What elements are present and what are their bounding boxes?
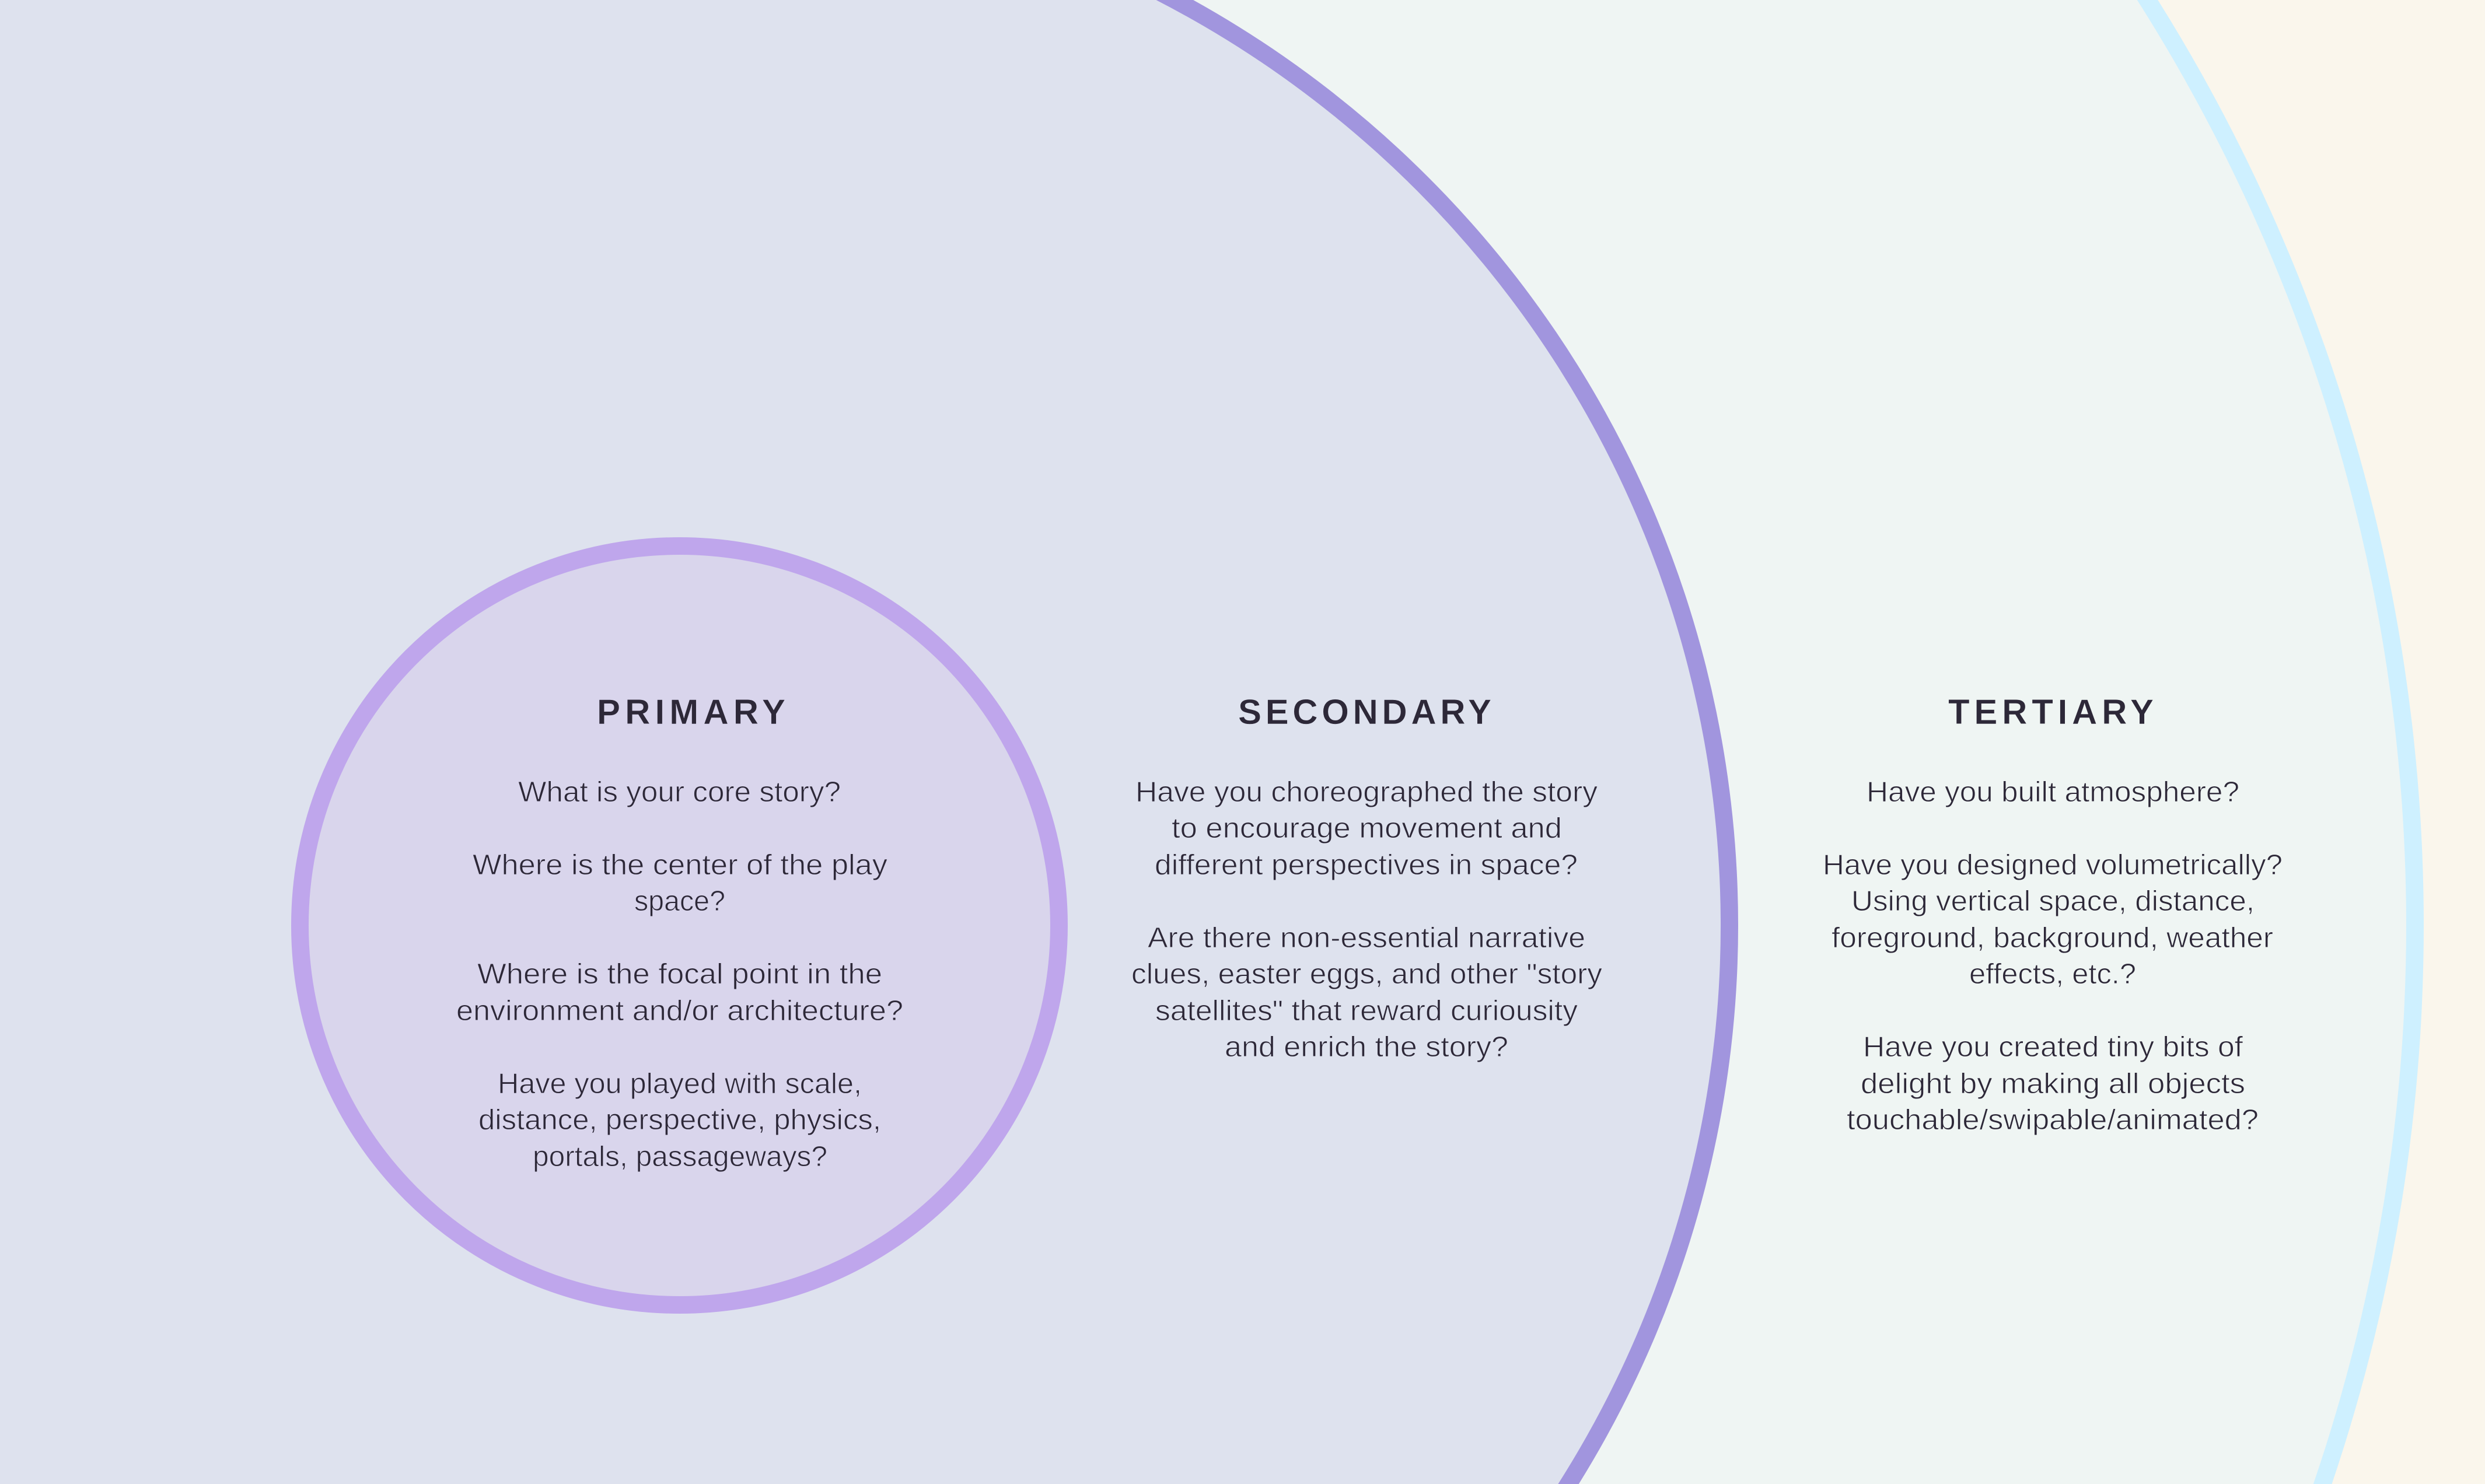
question: focal point: environment and/or architecture? xyxy=(456,995,903,1027)
question: tiny bits of delight: Have you created tiny bits of xyxy=(1863,1031,2243,1063)
primary ring circle xyxy=(300,546,1059,1305)
panel: secondary text xyxy=(1131,692,1603,1063)
question: story satellites: satellites" that reward curiousity xyxy=(1155,995,1578,1027)
question: volumetric design: effects, etc.? xyxy=(1969,958,2136,990)
question: scale and distance xyxy=(478,1068,881,1172)
question: volumetric design xyxy=(1823,849,2283,990)
question: center of play space xyxy=(473,849,888,917)
question: scale and distance: portals, passageways? xyxy=(533,1141,827,1172)
question: tiny bits of delight: delight by making all objects xyxy=(1861,1068,2245,1100)
question: center of play space: Where is the center of the play xyxy=(473,849,888,881)
question: choreography: Have you choreographed the story xyxy=(1135,776,1598,808)
question: focal point: Where is the focal point in the xyxy=(477,958,882,990)
question: volumetric design: Using vertical space, distance, xyxy=(1851,886,2255,917)
question: story satellites: Are there non-essential narrative xyxy=(1148,922,1585,954)
question: scale and distance: Have you played with scale, xyxy=(498,1068,862,1100)
question: tiny bits of delight xyxy=(1847,1031,2259,1136)
panel: primary text xyxy=(456,692,903,1172)
heading: secondary: SECONDARY xyxy=(1238,692,1491,732)
secondary ring and region xyxy=(0,0,1738,1484)
question: volumetric design: foreground, background, weather xyxy=(1832,922,2273,954)
question: story satellites: and enrich the story? xyxy=(1225,1031,1508,1063)
question: choreography: different perspectives in space? xyxy=(1155,849,1578,881)
question: story satellites: clues, easter eggs, and other "story xyxy=(1131,958,1603,990)
heading: tertiary: TERTIARY xyxy=(1948,692,2154,732)
question: focal point xyxy=(456,958,903,1027)
question: story satellites xyxy=(1131,922,1603,1063)
panel: tertiary text xyxy=(1823,692,2283,1136)
question: choreography xyxy=(1135,776,1598,881)
heading: primary: PRIMARY xyxy=(597,692,785,732)
question: volumetric design: Have you designed volumetrically? xyxy=(1823,849,2283,881)
question: core story: What is your core story? xyxy=(518,776,841,808)
question: atmosphere: Have you built atmosphere? xyxy=(1867,776,2239,808)
question: center of play space: space? xyxy=(634,886,725,917)
question: scale and distance: distance, perspective, physics, xyxy=(478,1104,881,1136)
question: choreography: to encourage movement and xyxy=(1172,813,1562,844)
question: tiny bits of delight: touchable/swipable/animated? xyxy=(1847,1104,2259,1136)
